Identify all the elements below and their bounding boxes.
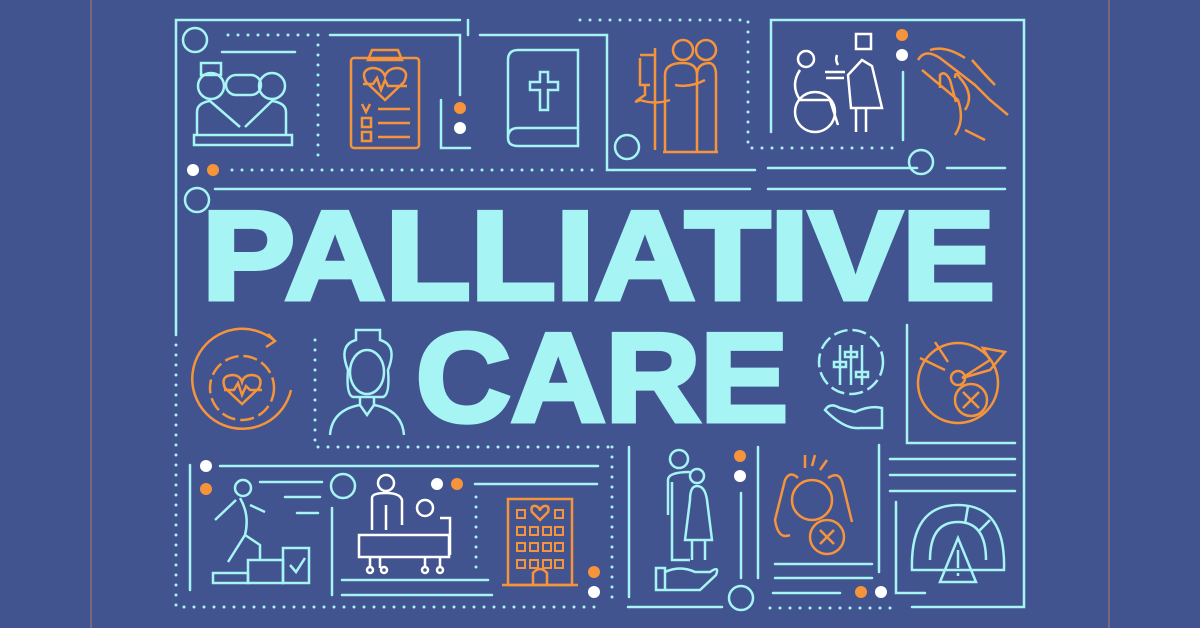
title	[202, 185, 995, 448]
dots	[187, 29, 908, 598]
title: PALLIATIVE	[202, 185, 995, 326]
icon: nurse	[330, 330, 404, 435]
icon: stressed head	[775, 455, 852, 554]
icon: hands	[918, 49, 1008, 140]
icon: hospital building	[502, 499, 578, 585]
icon: couple on hand	[656, 450, 717, 590]
title: CARE	[416, 307, 788, 448]
icon: clipboard	[351, 50, 419, 148]
icon: climbing	[213, 480, 309, 583]
icon: bible	[508, 50, 578, 146]
icon: consultation	[194, 63, 292, 145]
icon: hospital bed	[359, 475, 450, 573]
icon: gauge warning	[912, 505, 1004, 582]
icon: iv patient	[636, 40, 718, 152]
icon: radar	[918, 342, 1005, 423]
icon: gear heart	[192, 329, 291, 429]
icon: wheelchair nurse	[795, 34, 882, 132]
icon: gear sliders	[819, 330, 883, 428]
